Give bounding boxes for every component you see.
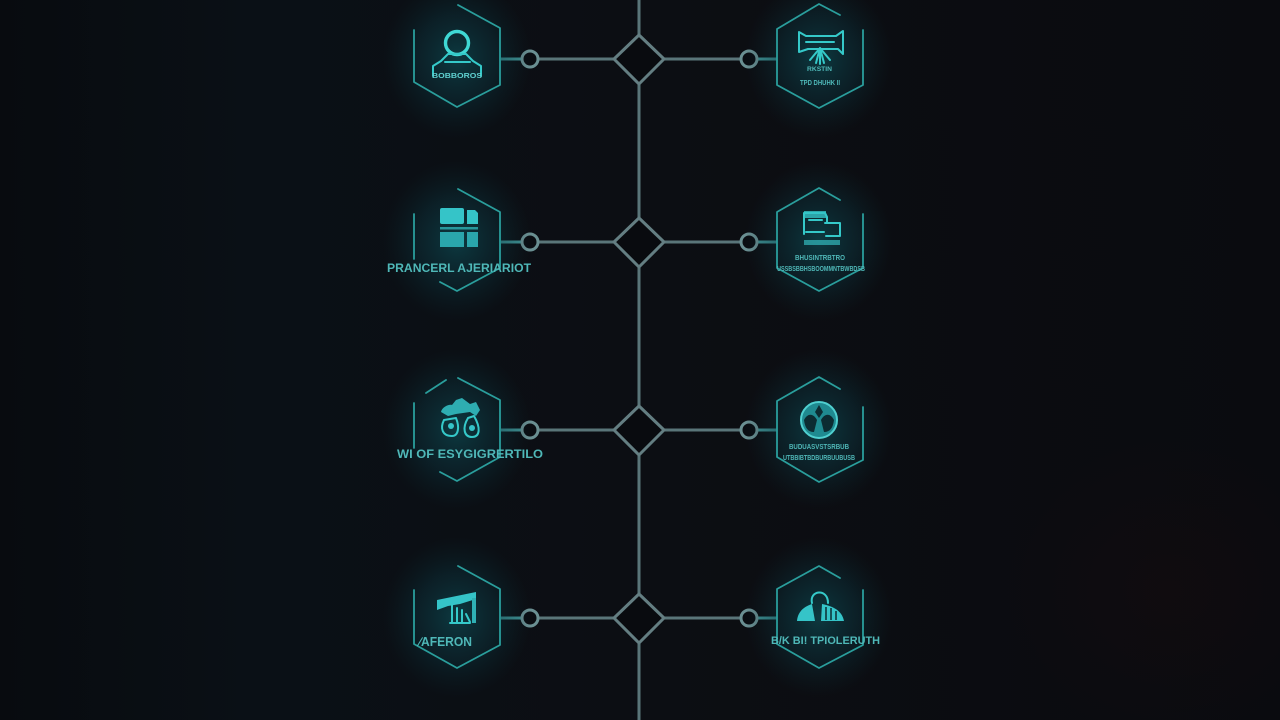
icon: person: BOBBOROS	[432, 71, 482, 80]
panel: right node 3	[745, 349, 893, 509]
panel: left node 1	[383, 0, 531, 138]
label: right node 4: B/K BI! TPIOLERUTH	[771, 635, 880, 647]
panel: left node 2	[383, 161, 532, 321]
icon: money bags	[441, 398, 480, 437]
row 4 connector	[501, 594, 777, 643]
icon: stacked files	[804, 211, 840, 245]
node 2 sub caption: USSBSBBHSBOOMMNTBWBDSB	[777, 266, 865, 273]
panel: right node 4	[745, 537, 893, 697]
central vertical spine	[638, 0, 640, 720]
icon: person	[432, 32, 482, 80]
row 1 connector	[501, 35, 777, 84]
icon: data blocks	[440, 208, 478, 247]
node 1 caption: RKSTIN	[807, 67, 832, 73]
node 3 caption: BUDUASVSTSRBUB	[789, 444, 849, 451]
node 3 sub caption: UTBBIBTBDBURBUUBUSB	[783, 455, 855, 462]
icon: shower gate	[799, 31, 843, 64]
panel: left node 4	[383, 537, 531, 697]
hexagon left edges	[414, 380, 446, 448]
icon: team figures	[797, 592, 844, 621]
label: left node 3: WI OF ESYGIGRERTILO	[397, 447, 543, 461]
node 2 caption: BHUSINTRBTRO	[795, 255, 845, 262]
label: left node 4: ∕AFERON	[416, 635, 472, 649]
icon: leaf emblem	[801, 402, 837, 438]
panel: right node 1	[745, 0, 893, 138]
row 3 connector	[501, 406, 777, 455]
hexagon left edge	[413, 214, 415, 259]
label: left node 2: PRANCERL AJERIARIOT	[387, 261, 532, 275]
panel: right node 2	[745, 161, 893, 321]
icon: crane and workers	[437, 592, 476, 623]
node 1 sub caption: TPD DHUHK II	[800, 80, 840, 87]
row 2 connector	[501, 218, 777, 267]
panel: left node 3	[383, 349, 543, 509]
